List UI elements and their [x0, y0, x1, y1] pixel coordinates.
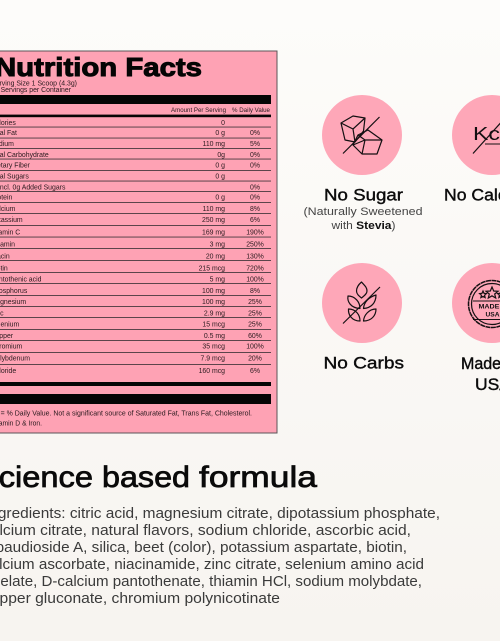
row: potassium: 6% [250, 217, 260, 224]
row: calcium: 8% [250, 206, 260, 213]
thick rule below table [0, 382, 271, 386]
row: zinc: 25% [248, 310, 262, 318]
row: total sugars: 0 g [215, 174, 225, 180]
nutrient table [0, 120, 271, 375]
row: chloride: 6% [250, 368, 260, 375]
column headers: Amount Per Serving [171, 107, 226, 114]
badge: made in usa [452, 263, 500, 394]
row: potassium: 250 mg [202, 217, 225, 224]
footnote: * = % Daily Value. Not a significant source of Saturated Fat, Trans Fat, Cholesterol. [0, 410, 252, 418]
black footer bar [0, 394, 271, 404]
row: calcium [0, 206, 260, 213]
black header bar [0, 95, 271, 104]
row: biotin: 215 mcg [199, 266, 225, 272]
row: selenium [0, 322, 262, 328]
row: protein: 0 g [215, 194, 225, 202]
row: molybdenum: 7.9 mcg [200, 356, 225, 362]
row: added sugars: 0% [250, 184, 260, 192]
row: phosphorus [0, 288, 260, 295]
row: sodium: 5% [250, 141, 260, 148]
row: chloride [0, 368, 260, 375]
row: copper: 0.5 mg [204, 333, 225, 340]
icon: made in usa seal [452, 263, 500, 343]
label: no carbs: No Carbs [324, 354, 404, 372]
row: total fat: 0% [250, 130, 260, 137]
row: total fat [0, 130, 260, 137]
row: dietary fiber: 0 g [215, 162, 225, 170]
row: molybdenum [0, 356, 262, 362]
row: added sugars [0, 184, 260, 192]
row: total fat: 0 g [215, 130, 225, 137]
row: calories: 0 [221, 120, 225, 127]
sublabel: naturally sweetened: with Stevia) [330, 220, 396, 232]
row: dietary fiber [0, 162, 260, 170]
row: chromium [0, 344, 264, 350]
row: protein: 0% [250, 194, 260, 202]
row: calories [0, 120, 225, 127]
row: vitamin c: 190% [246, 230, 264, 236]
row: molybdenum: 20% [248, 356, 262, 362]
row: copper [0, 333, 262, 340]
row: niacin: 20 mg [206, 254, 225, 260]
row: magnesium [0, 299, 262, 306]
thick rule under headers [0, 115, 271, 117]
row: total carbohydrate [0, 152, 260, 159]
heading: science based formula [0, 461, 317, 494]
row: zinc: 2.9 mg [204, 310, 225, 318]
label: made in usa [461, 354, 500, 394]
heading: science based formula: formula [199, 461, 317, 494]
row: total sugars [0, 174, 225, 180]
footnote [0, 410, 252, 428]
row: total carbohydrate: 0g [217, 152, 225, 159]
row: sodium: 110 mg [203, 141, 225, 148]
row: niacin [0, 254, 264, 260]
row: total carbohydrate: 0% [250, 152, 260, 159]
row: thiamin: 250% [246, 242, 264, 248]
badge: no carbs [322, 263, 404, 372]
row: sodium [0, 141, 260, 148]
icon: wheat crossed out [322, 263, 402, 343]
row: thiamin [0, 242, 264, 248]
row: copper: 60% [248, 333, 262, 340]
icon: sugar cubes crossed out [322, 95, 402, 175]
row: magnesium: 25% [248, 299, 262, 306]
row: pantothenic acid: 100% [246, 276, 264, 284]
heading: nutrition facts: Nutrition Facts [0, 52, 202, 82]
row: selenium: 25% [248, 322, 262, 328]
serving information [0, 80, 77, 94]
row: pantothenic acid: 5 mg [210, 276, 225, 284]
row: vitamin c: 169 mg [202, 230, 225, 236]
row: phosphorus: 8% [250, 288, 260, 295]
row: chromium: 35 mcg [202, 344, 225, 350]
row: chromium: 100% [246, 344, 264, 350]
row: calcium: 110 mg [203, 206, 225, 213]
badge: no sugar [304, 95, 422, 232]
panel: nutrition facts label [0, 51, 277, 433]
row: niacin: 130% [246, 254, 264, 260]
row: protein [0, 194, 260, 202]
column headers [171, 107, 270, 114]
row: dietary fiber: 0% [250, 162, 260, 170]
row: chloride: 160 mcg [199, 368, 225, 375]
row: potassium [0, 217, 260, 224]
row: pantothenic acid [0, 276, 264, 284]
heading: science based formula: based [102, 461, 190, 494]
row: added sugars: Incl. 0g Added Sugars [0, 184, 66, 192]
row: biotin: 720% [246, 266, 264, 272]
sublabel: naturally sweetened [304, 206, 422, 232]
sublabel: naturally sweetened: (Naturally Sweetened [304, 206, 422, 218]
label: no sugar: No Sugar [324, 186, 403, 204]
row: phosphorus: 100 mg [202, 288, 225, 295]
row: zinc [0, 310, 262, 318]
column headers: % Daily Value [232, 107, 270, 114]
badge: no calories [444, 95, 500, 204]
ingredients text [0, 506, 440, 607]
row: selenium: 15 mcg [202, 322, 225, 328]
icon: made in usa seal: USA [486, 312, 500, 318]
row: thiamin: 3 mg [210, 242, 225, 248]
row: vitamin c [0, 230, 264, 236]
row: magnesium: 100 mg [202, 299, 225, 306]
row: biotin [0, 266, 264, 272]
